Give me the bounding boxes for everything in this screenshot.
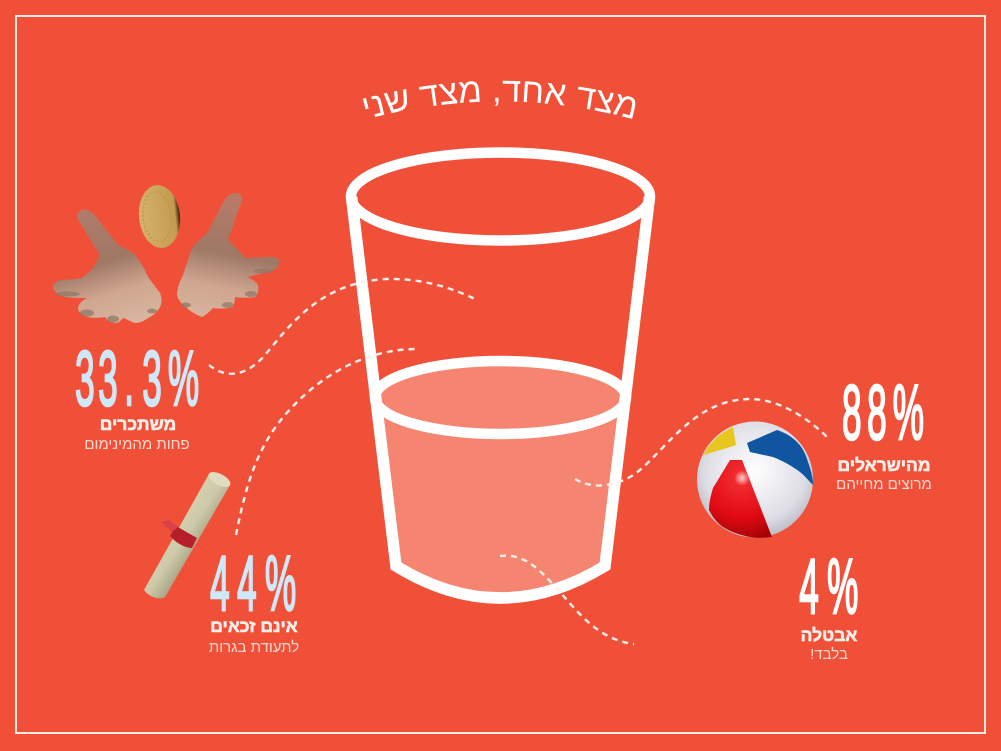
- coin: [136, 183, 183, 250]
- glass outline: [351, 152, 650, 598]
- icon: hands and coin: [53, 183, 279, 323]
- dashed connector: 4%: [500, 556, 634, 644]
- dashed connector: 44%: [236, 349, 415, 535]
- number: 4%: [799, 542, 858, 630]
- sublabel: פחות מהמינימום: [84, 436, 190, 453]
- glass with water: [351, 152, 650, 598]
- stat: 33.3%: [75, 334, 199, 453]
- stat: 88%: [836, 368, 932, 493]
- dashed connector: 88%: [575, 399, 827, 486]
- stat: 44%: [209, 539, 299, 656]
- number: 88%: [842, 368, 924, 456]
- label: מהישראלים: [837, 455, 931, 475]
- title: מצד אחד, מצד שני: [362, 80, 636, 119]
- number: 44%: [210, 539, 296, 627]
- number: 33.3%: [75, 334, 199, 422]
- icon: diploma scroll: [144, 469, 233, 598]
- right hand: [177, 193, 279, 317]
- water: [376, 360, 626, 598]
- label: משתכרים: [100, 414, 176, 434]
- dashed connector: 33.3%: [209, 279, 475, 374]
- finger shading: [56, 268, 274, 322]
- sublabel: מרוצים מחייהם: [836, 476, 932, 493]
- label: אבטלה: [801, 625, 857, 645]
- label: אינם זכאים: [210, 616, 298, 636]
- stat: 4%: [799, 542, 858, 663]
- sublabel: לתעודת בגרות: [209, 639, 299, 656]
- left hand: [53, 209, 162, 323]
- sublabel: בלבד!: [810, 646, 848, 663]
- icon: beach ball: [697, 422, 813, 538]
- title: [362, 80, 636, 119]
